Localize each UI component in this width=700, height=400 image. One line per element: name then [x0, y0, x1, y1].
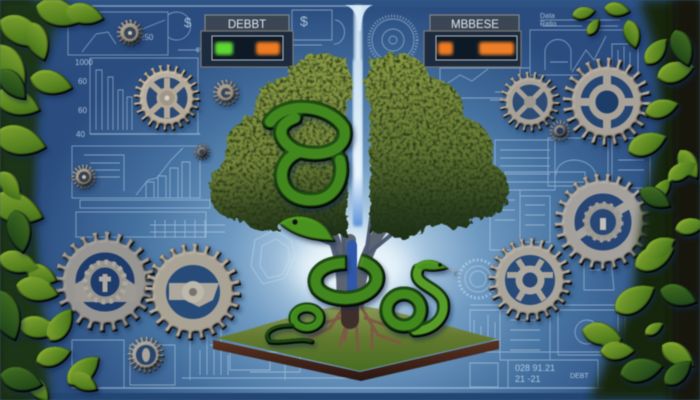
- tree canopy: right: [365, 53, 509, 238]
- blueprint small labels: Ratio: [540, 21, 556, 28]
- gear: small between right gears: [551, 122, 569, 140]
- right foliage border: [571, 0, 700, 400]
- gear: right middle large: [559, 178, 647, 266]
- snake: left ground coil and tail: [268, 308, 320, 342]
- blueprint small labels: $: [300, 13, 308, 29]
- gear: bottom left second: [149, 248, 237, 336]
- snake: head in branches: [279, 216, 336, 242]
- gear: left panel small: [74, 166, 94, 188]
- gear: top right large: [567, 62, 647, 142]
- right leaves: [571, 0, 700, 376]
- grass top: [216, 305, 497, 371]
- gear: right bottom: [492, 242, 568, 318]
- island: ground slab: [213, 305, 499, 381]
- beam over canopy: [353, 60, 362, 225]
- blueprint line drawings: left: [68, 6, 650, 388]
- obese label plate: MBBESE: [451, 19, 499, 31]
- panel: obese indicator: [424, 15, 521, 67]
- snake: rising neck and right coil: [387, 260, 456, 331]
- blueprint small labels: $%: [196, 48, 205, 54]
- blueprint small labels: 21 -21: [515, 374, 541, 384]
- blueprint small labels: 028 91.21: [515, 363, 555, 373]
- snake: upper coil in canopy: [270, 108, 345, 200]
- blueprint small labels: 1000: [75, 58, 93, 67]
- pale glow behind trunk: [294, 234, 410, 302]
- gear: tiny swirl: [195, 145, 209, 159]
- blueprint small labels: DEBT: [570, 373, 589, 380]
- blueprint small labels: $: [184, 15, 192, 30]
- blueprint small labels: 250: [140, 33, 154, 42]
- tree roots: [305, 300, 400, 350]
- debt gauge: [201, 31, 293, 67]
- gear: near debt panel: [215, 82, 237, 104]
- gear: top left large: [137, 68, 197, 128]
- gear: bottom left large: [59, 236, 151, 328]
- tree canopy: left: [209, 53, 353, 238]
- left leaves: [0, 0, 108, 400]
- obese gauge: [424, 31, 521, 67]
- gear: top right left-hand: [503, 75, 557, 129]
- blueprint small labels: 40: [76, 130, 85, 139]
- tree trunk and branches: [300, 212, 402, 305]
- left foliage border: [0, 0, 108, 400]
- blueprint small labels: [75, 13, 589, 384]
- debt label plate: DEBBT: [228, 19, 266, 31]
- blueprint small labels: Data: [540, 13, 555, 20]
- blueprint small labels: 60: [78, 77, 87, 86]
- panel: debt indicator: [201, 15, 293, 67]
- gear: top left small: [119, 22, 141, 44]
- snake: coil around trunk: [316, 261, 377, 299]
- soil side: [213, 340, 499, 381]
- gear: bottom small: [130, 339, 162, 371]
- central light beam: [345, 5, 373, 226]
- blueprint small labels: 60: [78, 106, 87, 115]
